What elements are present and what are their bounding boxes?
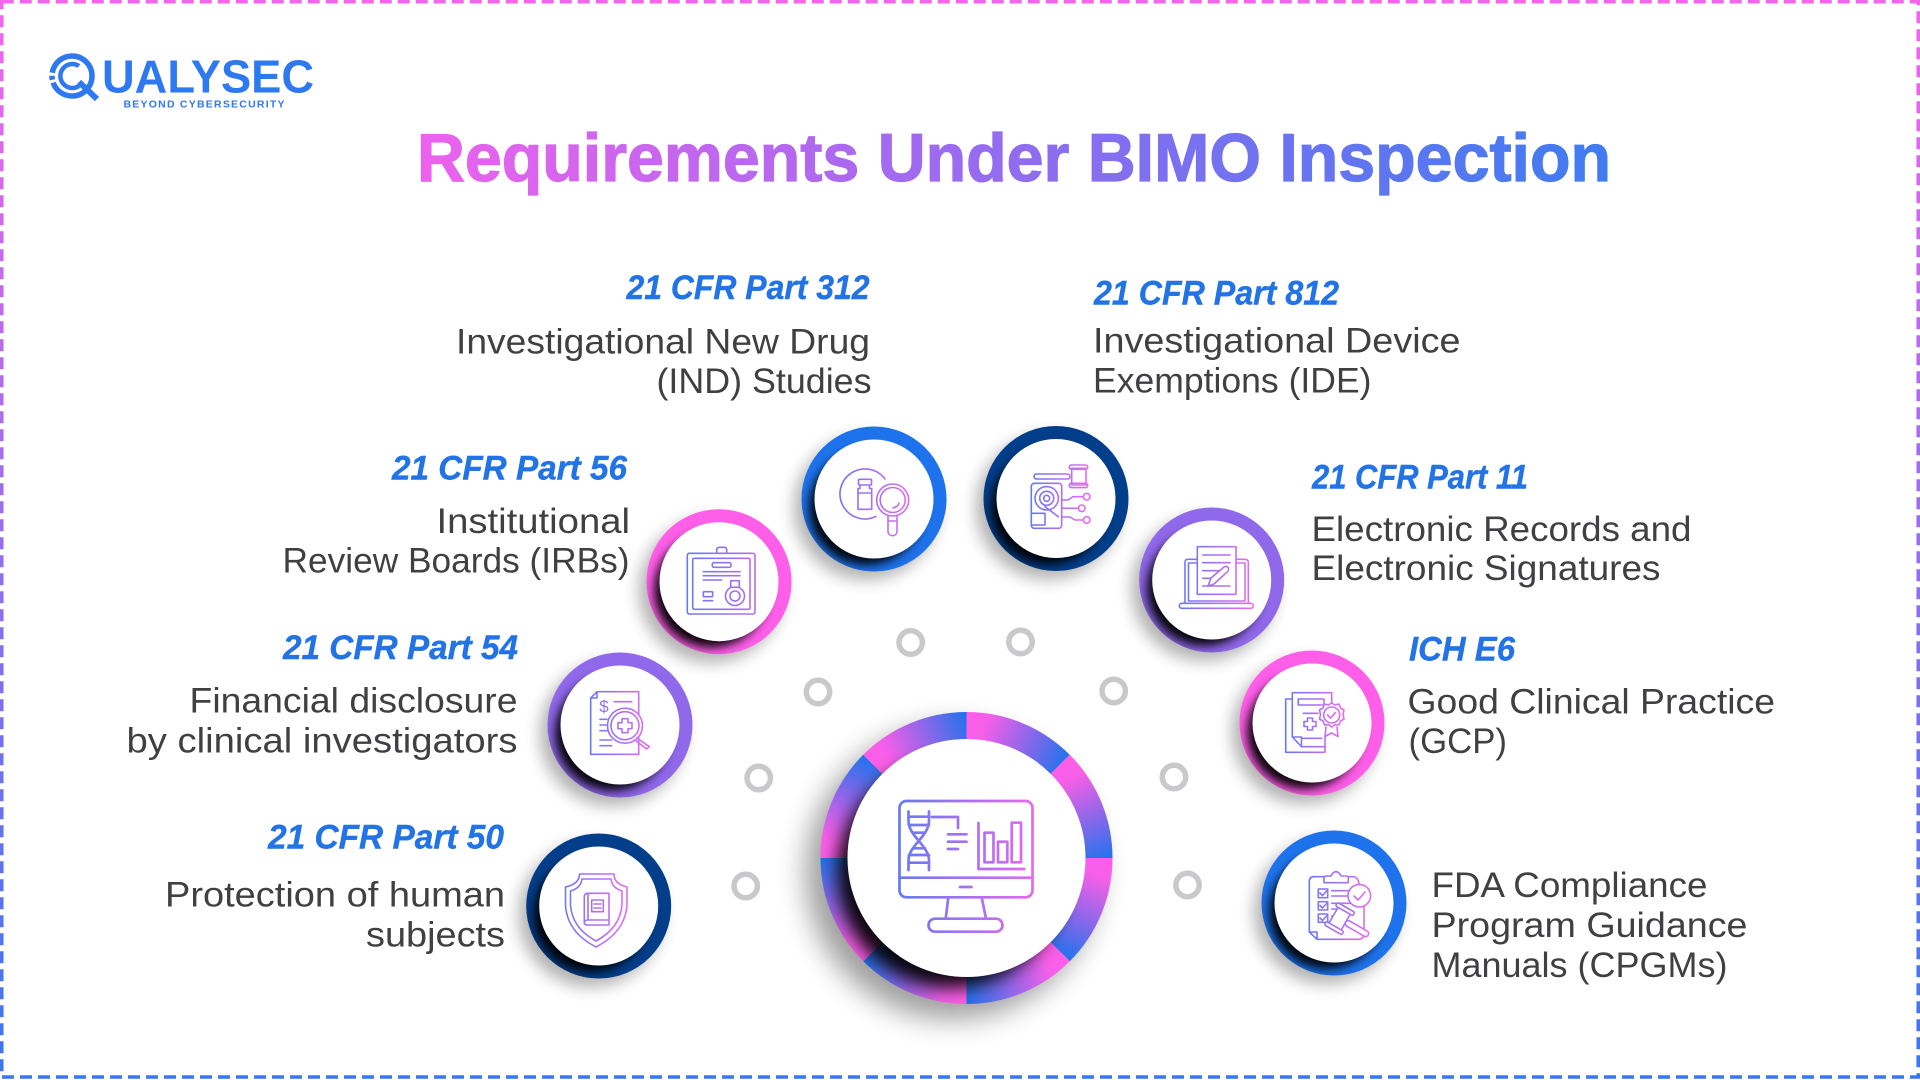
heading: 21 CFR Part 812 — [1093, 274, 1339, 312]
description: Good Clinical Practice — [1408, 682, 1775, 722]
central hub — [806, 712, 1112, 1019]
description — [1312, 509, 1692, 588]
logo tagline: BEYOND CYBERSECURITY — [124, 98, 284, 110]
description — [456, 322, 872, 401]
badge: compliance clipboard — [1254, 830, 1406, 984]
description: by clinical investigators — [126, 720, 518, 760]
panel: 21 CFR Part 56 — [282, 449, 792, 663]
badge: institutional review ID — [639, 509, 792, 663]
description: Manuals (CPGMs) — [1432, 945, 1728, 985]
icon: monitor with DNA and bar chart — [900, 801, 1032, 932]
badge: human subjects protection — [519, 834, 671, 987]
icon: certified medical document — [1286, 693, 1344, 752]
title: Requirements Under BIMO Inspection — [417, 120, 1611, 196]
badge: financial document — [540, 652, 692, 806]
description — [1093, 320, 1460, 400]
segmented gradient ring — [820, 712, 1112, 1004]
description — [1432, 865, 1748, 985]
panel: 21 CFR Part 54 — [126, 629, 692, 806]
icon: financial document and magnifier: $ — [599, 697, 609, 716]
description: (GCP) — [1408, 721, 1507, 761]
heading: 21 CFR Part 50 — [267, 818, 504, 856]
panel: 21 CFR Part 50 — [165, 818, 671, 987]
icon: ID badge with seal — [687, 547, 755, 614]
description: Financial disclosure — [190, 680, 518, 720]
badge: good clinical practice certificate — [1232, 650, 1384, 804]
panel: 21 CFR Part 812 — [976, 274, 1460, 580]
badge: drug vial and magnifier — [794, 426, 946, 580]
panel: 21 CFR Part 312 — [456, 269, 946, 580]
heading: ICH E6 — [1409, 631, 1516, 669]
icon: hard drive with gavel — [1031, 465, 1090, 528]
description — [1408, 682, 1775, 761]
description: (IND) Studies — [656, 361, 872, 401]
heading: 21 CFR Part 312 — [626, 269, 870, 307]
description: Exemptions (IDE) — [1093, 360, 1372, 400]
description: FDA Compliance — [1432, 865, 1708, 905]
icon: shield with book — [566, 874, 627, 947]
heading: 21 CFR Part 56 — [391, 449, 628, 487]
connector dots — [734, 630, 1199, 898]
description — [126, 680, 518, 760]
heading: 21 CFR Part 11 — [1311, 458, 1528, 496]
description: Institutional — [436, 501, 630, 541]
panel: 21 CFR Part 11 — [1132, 458, 1692, 661]
heading: 21 CFR Part 54 — [282, 629, 518, 667]
description: Electronic Signatures — [1312, 548, 1660, 588]
description: Electronic Records and — [1312, 509, 1692, 549]
description — [282, 501, 630, 580]
description — [165, 874, 505, 954]
description: subjects — [366, 914, 505, 954]
icon: clipboard checklist with gavel and check badge — [1309, 872, 1375, 946]
badge: device hard drive and gavel — [976, 426, 1128, 580]
logo wordmark: UALYSEC — [102, 50, 314, 102]
icon: logo Q mark — [52, 56, 97, 99]
panel: ICH E6 — [1232, 631, 1775, 804]
description: Protection of human — [165, 874, 505, 914]
icon: financial document and magnifier — [591, 692, 649, 754]
panel: FDA Compliance Program Guidance Manuals — [1254, 830, 1748, 985]
description: Program Guidance — [1432, 905, 1748, 945]
icon: vial — [840, 469, 909, 536]
icon: laptop with signed document — [1179, 547, 1253, 608]
logo: Qualysec — [52, 50, 314, 110]
description: Review Boards (IRBs) — [282, 540, 630, 580]
description: Investigational New Drug — [456, 322, 870, 362]
description: Investigational Device — [1093, 320, 1460, 360]
badge: electronic records laptop — [1132, 508, 1284, 661]
